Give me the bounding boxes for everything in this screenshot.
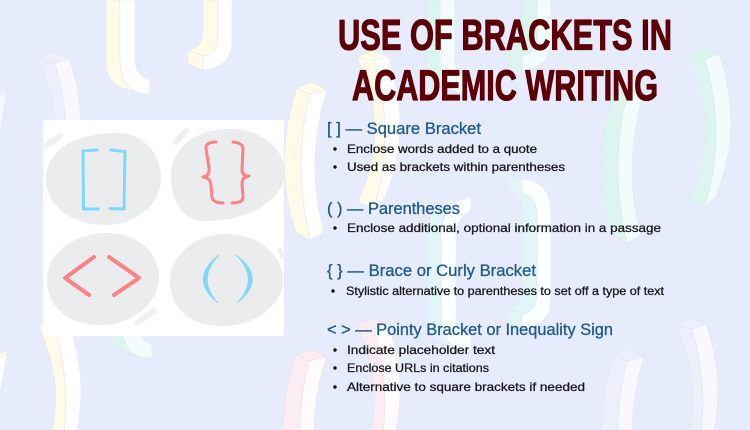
- panel: bracket icons card: [43, 120, 285, 336]
- section: pointy bracket or inequality sign: Indicate placeholder text: [347, 343, 496, 357]
- icon: curly braces: [171, 129, 285, 221]
- section: brace or curly bracket: { } — Brace or Curly Bracket: [327, 262, 536, 280]
- title: [338, 12, 672, 110]
- icon: parentheses: [170, 234, 283, 326]
- section: pointy bracket or inequality sign: Alternative to square brackets if needed: [347, 380, 585, 394]
- section: brace or curly bracket: [327, 262, 665, 298]
- section: square bracket: [327, 120, 565, 174]
- section: parentheses: [327, 200, 661, 235]
- section: square bracket: Used as brackets within parentheses: [347, 160, 565, 174]
- section: pointy bracket or inequality sign: [327, 321, 613, 394]
- section: pointy bracket or inequality sign: Enclose URLs in citations: [347, 361, 489, 375]
- section: parentheses: ( ) — Parentheses: [327, 200, 460, 218]
- section: parentheses: Enclose additional, optional information in a passage: [347, 221, 661, 235]
- section: square bracket: Enclose words added to a quote: [347, 142, 537, 156]
- icon: angle brackets: [47, 233, 159, 325]
- icon: square brackets: [46, 133, 161, 225]
- section: pointy bracket or inequality sign: < > — Pointy Bracket or Inequality Sign: [327, 321, 613, 339]
- section: brace or curly bracket: Stylistic alternative to parentheses to set off a type of text: [346, 284, 665, 298]
- section: square bracket: [ ] — Square Bracket: [327, 120, 481, 138]
